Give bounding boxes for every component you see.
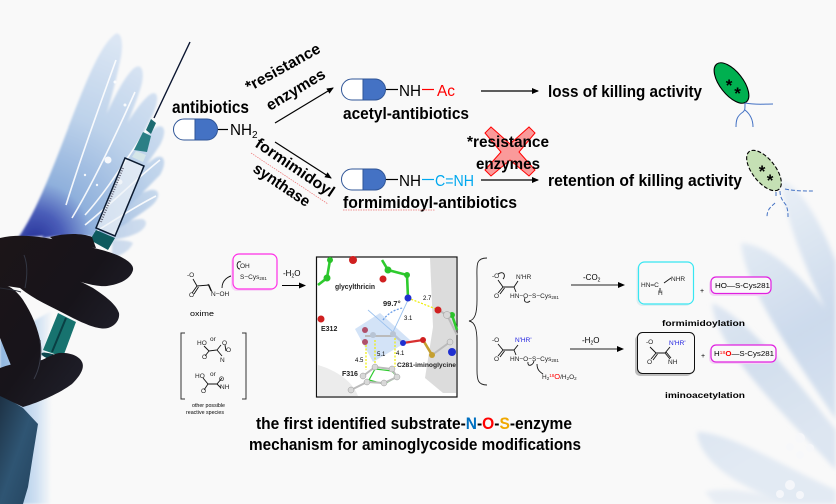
- chem: iminoacetylation intermediate: HN−O−S−Cys: [510, 356, 551, 363]
- panel: active site structure: [316, 256, 457, 397]
- panel: active site structure: 99.7°: [383, 299, 401, 308]
- callout: iminoacetylation product: -O: [646, 339, 653, 346]
- chem: formimidoylation intermediate: 281: [551, 295, 559, 300]
- panel: active site structure: F316: [342, 371, 358, 378]
- label: resistance enzymes: [243, 40, 329, 114]
- callout: H18O-S-Cys281: —S-Cys281: [731, 351, 769, 358]
- chem: other possible reactive species: HO: [195, 373, 205, 380]
- chem: iminoacetylation intermediate: O: [554, 372, 560, 381]
- conclusion text: the first identified substrate-N-O-S-enzyme: [256, 415, 572, 433]
- label: minus water lower: O: [593, 336, 599, 345]
- label: blocked resistance enzymes: *resistance: [467, 134, 549, 151]
- label: acetyl-antibiotics: acetyl-antibiotics: [343, 104, 469, 123]
- callout: S-Cys281 box: OH: [240, 263, 250, 270]
- label: minus water lower: 2: [590, 340, 593, 346]
- chem: other possible reactive species: O: [202, 354, 207, 361]
- arrow: to formimidoylation: [571, 284, 624, 286]
- arrow: to retention of killing activity: [481, 179, 538, 181]
- chem: iminoacetylation intermediate: 281: [551, 358, 559, 363]
- capsule: antibiotics: 2: [252, 130, 258, 141]
- chem: oxime: O: [189, 292, 194, 299]
- label: resistance enzymes: enzymes: [263, 66, 329, 114]
- illustration: gloved hand: [0, 234, 133, 407]
- callout: formimidoylation product: [636, 262, 694, 306]
- label: formimidoylation: formimidoylation: [662, 318, 745, 328]
- chem: iminoacetylation intermediate: O: [494, 356, 499, 363]
- label: formimidoyl-antibiotics: formimidoyl-antibiotics: [343, 193, 517, 212]
- chem: other possible reactive species: NH: [220, 384, 230, 391]
- icon: inactive bacterium: [740, 145, 813, 217]
- capsule: formimidoyl product: NH: [399, 173, 421, 190]
- label: minus CO2: -CO: [583, 273, 598, 282]
- chem: iminoacetylation intermediate: /H: [560, 374, 567, 381]
- illustration: syringe: [41, 42, 190, 363]
- label: plus: +: [700, 288, 704, 295]
- label: blocked resistance enzymes: [467, 134, 549, 173]
- chem: iminoacetylation intermediate: O: [569, 374, 574, 381]
- capsule: formimidoyl product: C=NH: [435, 173, 474, 190]
- chem: formimidoylation intermediate: N'HR: [516, 274, 532, 281]
- label: loss of killing activity: loss of killing activity: [548, 82, 702, 101]
- chem: oxime: -O: [187, 272, 194, 279]
- callout: H18O-S-Cys281: H: [714, 351, 719, 358]
- chem: other possible reactive species: O: [201, 388, 206, 395]
- panel: active site structure: E312: [321, 326, 337, 333]
- icon: active bacterium: *: [726, 76, 733, 95]
- callout: formimidoylation product: HN=C: [641, 282, 659, 289]
- capsule: acetyl product: [342, 79, 455, 100]
- label: minus water: -H: [283, 269, 291, 278]
- conclusion text: mechanism for aminoglycoside modifications: [249, 436, 581, 454]
- bracket: pathway split: [469, 258, 487, 385]
- chem: other possible reactive species: HO: [197, 340, 207, 347]
- capsule: antibiotics: NH: [230, 122, 252, 139]
- label: minus CO2: 2: [598, 278, 601, 284]
- label: retention of killing activity: retention of killing activity: [548, 171, 743, 190]
- chem: formimidoylation intermediate: O: [494, 293, 499, 300]
- chem: formimidoylation intermediate: -O: [492, 273, 499, 280]
- callout: S-Cys281 box: 281: [259, 276, 267, 281]
- callout: S-Cys281 box: S−Cys: [240, 274, 259, 281]
- icon: inactive bacterium: *: [767, 171, 774, 190]
- panel: active site structure: 4.5: [355, 358, 364, 364]
- arrow: to formimidoyl-antibiotics: [275, 142, 331, 178]
- callout: S-Cys281 box: [231, 254, 277, 291]
- panel: active site structure: 2.7: [423, 296, 432, 302]
- callout: iminoacetylation product: N'HR': [669, 340, 686, 347]
- chem: iminoacetylation intermediate: N'HR': [515, 337, 532, 344]
- chem: other possible reactive species: other possible: [192, 403, 225, 409]
- capsule: acetyl product: NH: [399, 83, 421, 100]
- label: minus water: 2: [291, 274, 294, 280]
- chem: other possible reactive species: O: [222, 340, 227, 347]
- chem: other possible reactive species: N: [220, 357, 225, 364]
- panel: active site structure: 3.1: [404, 316, 413, 322]
- chem: other possible reactive species: O: [219, 376, 224, 383]
- label: minus water: O: [294, 269, 300, 278]
- arrow: to loss of killing activity: [481, 90, 538, 92]
- capsule: acetyl product: Ac: [437, 83, 455, 100]
- label: minus water lower: -H: [582, 336, 590, 345]
- chem: iminoacetylation intermediate: [492, 337, 577, 381]
- conclusion text: [249, 415, 581, 454]
- chem: iminoacetylation intermediate: -O: [492, 337, 499, 344]
- chem: iminoacetylation intermediate: 2: [567, 376, 570, 381]
- chem: iminoacetylation intermediate: H: [542, 374, 547, 381]
- chem: other possible reactive species: or: [210, 371, 217, 378]
- label: formimidoyl synthase: synthase: [250, 160, 313, 211]
- callout: iminoacetylation product: O: [647, 359, 652, 366]
- chem: iminoacetylation intermediate: 2: [547, 376, 550, 381]
- arrow: to iminoacetylation: [570, 348, 623, 350]
- panel: active site structure: 5.1: [377, 352, 386, 358]
- chem: formimidoylation intermediate: HN−O−S−Cys: [510, 293, 551, 300]
- label: resistance enzymes: *resistance: [243, 40, 324, 95]
- panel: active site structure: 4.1: [396, 351, 405, 357]
- label: formimidoyl synthase: formimidoyl: [252, 135, 338, 201]
- icon: red cross: [485, 127, 535, 176]
- chem: other possible reactive species: O: [226, 347, 231, 354]
- arrow: to acetyl-antibiotics: [275, 88, 333, 123]
- chem: other possible reactive species: [181, 333, 246, 416]
- chem: other possible reactive species: or: [210, 336, 217, 343]
- background: pale blue feathers lower right: [697, 180, 836, 504]
- chem: iminoacetylation intermediate: 18: [549, 373, 555, 378]
- callout: H18O-S-Cys281: O: [725, 351, 732, 358]
- background: white flower marks lower right: [776, 433, 814, 499]
- label: iminoacetylation: iminoacetylation: [665, 390, 745, 400]
- callout: H18O-S-Cys281: 18: [720, 350, 726, 355]
- illustration: pale glow behind hand: [0, 310, 53, 504]
- chem: oxime: oxime: [190, 309, 214, 318]
- callout: HO-S-Cys281: [709, 277, 771, 296]
- chem: formimidoylation intermediate: [492, 273, 559, 302]
- chem: oxime: [187, 272, 238, 318]
- capsule: formimidoyl product: [342, 169, 474, 190]
- icon: active bacterium: *: [734, 84, 741, 103]
- callout: H18O-S-Cys281: [709, 345, 776, 364]
- callout: iminoacetylation product: [635, 332, 694, 376]
- callout: HO-S-Cys281: HO—S-Cys281: [715, 283, 770, 290]
- capsule: antibiotics: [174, 119, 258, 141]
- icon: inactive bacterium: *: [759, 162, 766, 181]
- chem: other possible reactive species: reactive species: [186, 410, 224, 416]
- illustration: sleeve: [0, 394, 38, 504]
- callout: iminoacetylation product: NH: [668, 359, 678, 366]
- callout: formimidoylation product: NHR: [671, 276, 685, 283]
- label: blocked resistance enzymes: enzymes: [476, 156, 540, 173]
- chem: oxime: N−OH: [211, 291, 230, 298]
- label: antibiotics: antibiotics: [172, 97, 249, 117]
- arrow: oxime to active site: [282, 284, 305, 286]
- panel: active site structure: C281-iminoglycine: [397, 362, 456, 369]
- icon: active bacterium: [708, 57, 773, 127]
- illustration: syringe wings: [18, 34, 164, 257]
- panel: active site structure: glycylthricin: [335, 284, 375, 291]
- chem: iminoacetylation intermediate: 2: [574, 376, 577, 381]
- callout: formimidoylation product: H: [658, 290, 663, 297]
- label: plus lower: +: [701, 353, 705, 360]
